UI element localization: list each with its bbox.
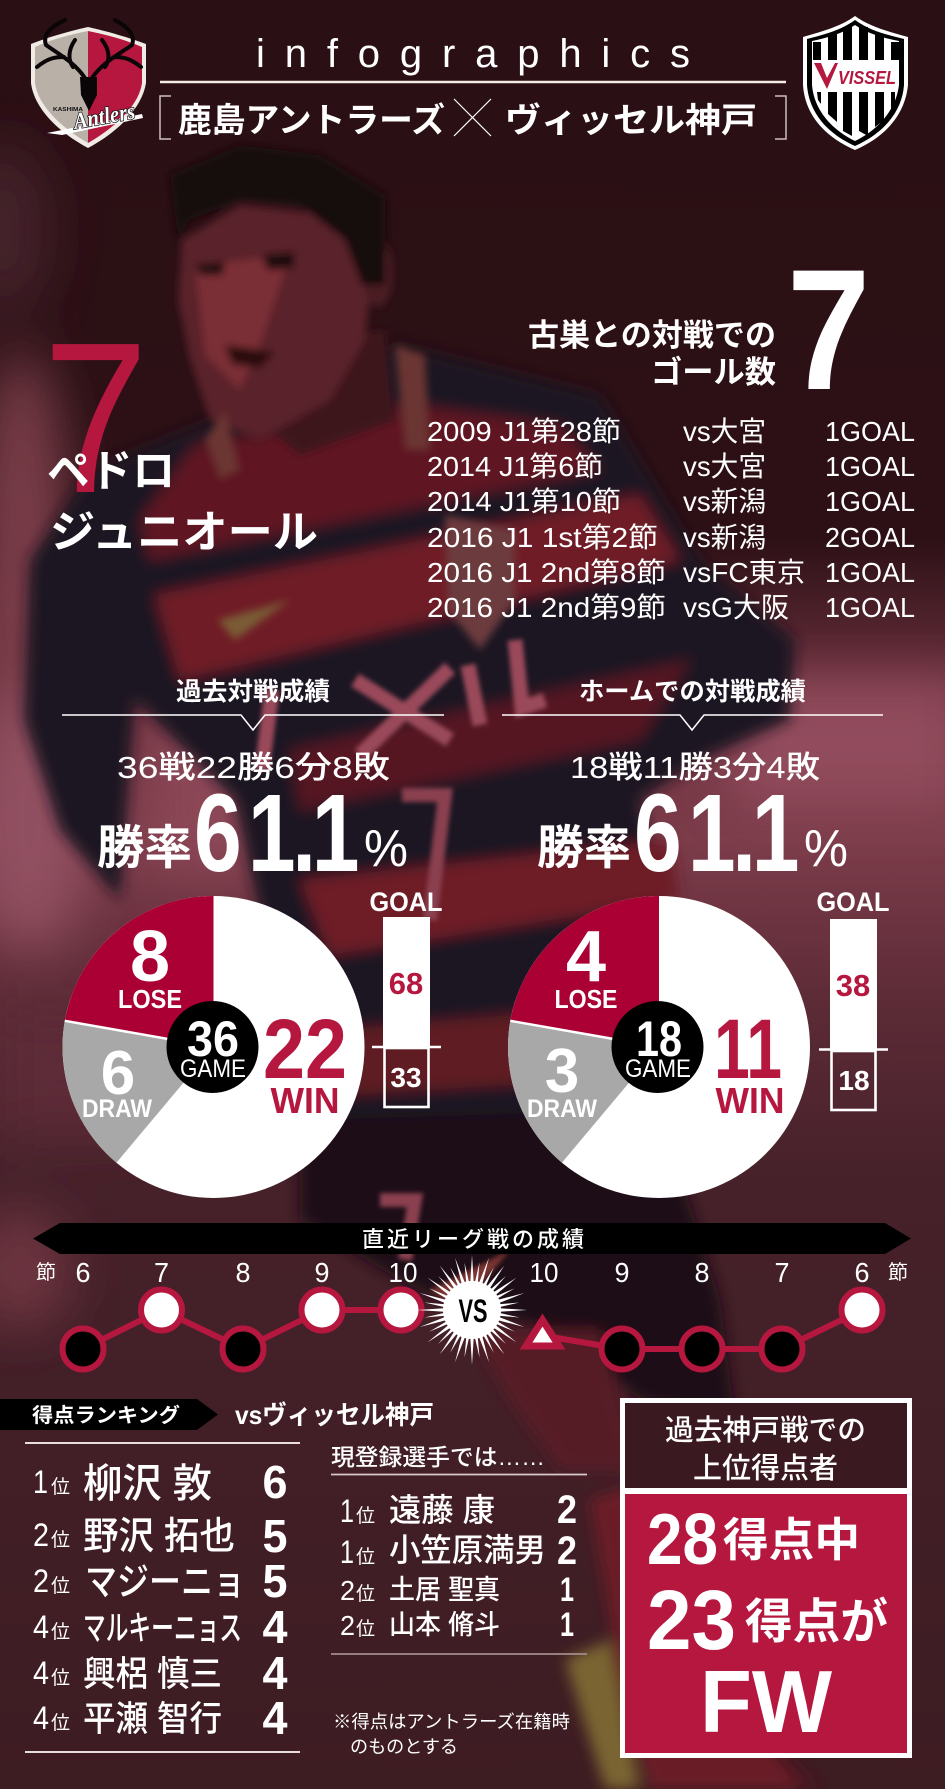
player name: ジュニオール <box>50 508 318 557</box>
logo: Kashima Antlers crest <box>31 20 146 148</box>
win rate <box>97 772 408 894</box>
round number labels: 6 <box>76 1257 90 1288</box>
pie chart: DRAW <box>82 1095 152 1123</box>
win rate: 勝率 <box>537 821 631 874</box>
pie chart: LOSE <box>118 984 182 1014</box>
goal history table: 1GOAL <box>825 416 915 447</box>
rank rows: 4 <box>262 1601 288 1653</box>
pie chart: GAME <box>625 1055 691 1083</box>
neck <box>235 330 395 455</box>
ranking heading: vs Vissel Kobe: vsヴィッセル神戸 <box>235 1400 434 1430</box>
rank rows: 位 <box>51 1476 70 1498</box>
shorts <box>300 1110 735 1420</box>
badge <box>445 515 515 650</box>
rank rows: 興梠 慎三 <box>83 1655 222 1694</box>
round number labels: 9 <box>314 1257 330 1288</box>
pie chart: WIN <box>270 1080 340 1121</box>
match-up heading: ヴィッセル神戸 <box>505 102 757 140</box>
match-up heading: 鹿島アントラーズ <box>178 101 445 140</box>
goal history table: vsG大阪 <box>683 592 789 623</box>
round number labels: 7 <box>774 1257 790 1288</box>
ranking list: all-time <box>25 1443 300 1752</box>
round number labels: 8 <box>694 1257 710 1288</box>
player shirt number 7 (crimson): 7 <box>43 298 148 538</box>
goal history table: vs大宮 <box>683 416 766 447</box>
footnote: のものとする <box>350 1737 458 1757</box>
round number labels: 9 <box>614 1257 630 1288</box>
rank rows: 4 <box>33 1609 49 1645</box>
banner: recent league results: 直近リーグ戦の成績 <box>362 1227 584 1252</box>
pie chart: 3 <box>545 1037 579 1106</box>
section heading: ホームでの対戦成績 <box>579 678 806 706</box>
rank rows: マルキーニョス <box>83 1610 242 1648</box>
goal bar: GOAL <box>370 887 442 917</box>
hair <box>170 145 385 285</box>
rank rows: 土居 聖真 <box>389 1575 500 1605</box>
ranking list: current squad <box>331 1444 587 1654</box>
logo wordmark: KASHIMA <box>53 107 83 113</box>
background photo: player figure <box>24 145 820 1789</box>
logo: Kashima Antlers crest: Antlers <box>70 99 137 134</box>
callout: top scorers against Kobe: 得点が <box>745 1596 888 1649</box>
goal bar: 38 <box>836 968 870 1003</box>
rank rows: 4 <box>262 1692 288 1744</box>
callout: top scorers against Kobe: 得点中 <box>723 1514 860 1566</box>
rank rows: 2 <box>33 1517 49 1553</box>
goal history table: 2016 J1 2nd第8節 <box>427 557 666 588</box>
rank rows: 位 <box>356 1546 375 1568</box>
round number labels: 10 <box>530 1257 558 1288</box>
goal history table: 1GOAL <box>825 486 915 517</box>
rank rows: 小笠原満男 <box>389 1532 546 1568</box>
record text: 36戦22勝6分8敗 <box>117 750 390 785</box>
jersey sponsor letters <box>262 640 545 770</box>
goal history table: 2014 J1第6節 <box>427 451 603 482</box>
rank rows: 柳沢 敦 <box>83 1462 212 1506</box>
pie chart: WIN <box>716 1080 784 1121</box>
rank rows: 位 <box>51 1575 70 1597</box>
rank rows: 1 <box>340 1534 354 1570</box>
round number labels <box>36 1257 908 1288</box>
round number labels: 8 <box>236 1257 250 1288</box>
goals against former club: ゴール数 <box>651 355 776 390</box>
goal history table: 2016 J1 2nd第9節 <box>427 592 666 623</box>
rank rows: 山本 脩斗 <box>389 1610 500 1640</box>
ranking tag <box>0 1399 218 1430</box>
goal history table: 1GOAL <box>825 451 915 482</box>
goal history table: 2GOAL <box>825 522 915 553</box>
win rate: 勝率 <box>97 821 192 874</box>
goal history table: vsFC東京 <box>683 557 805 588</box>
pie chart: 22 <box>263 1002 347 1096</box>
goal history table: 1GOAL <box>825 592 915 623</box>
rank rows: 遠藤 康 <box>389 1492 495 1528</box>
icon: VS burst <box>417 1255 527 1365</box>
rank rows: 位 <box>356 1505 375 1527</box>
goal history table: 2009 J1第28節 <box>427 416 621 447</box>
round number labels: 6 <box>854 1257 870 1288</box>
eyes and mouth <box>195 252 295 275</box>
win rate <box>537 772 848 894</box>
goal history table: vs新潟 <box>683 522 766 553</box>
header rule and brackets <box>160 81 786 83</box>
rank rows: 1 <box>33 1464 48 1500</box>
section heading: 過去対戦成績 <box>176 678 330 706</box>
pie chart: 18 <box>636 1011 682 1067</box>
goal bar <box>816 887 890 1110</box>
goal history table: 2014 J1第10節 <box>427 486 621 517</box>
rank rows: 5 <box>262 1555 288 1607</box>
pie chart <box>62 896 365 1198</box>
pie chart <box>508 896 810 1198</box>
goals against former club: 古巣との対戦での <box>528 318 776 353</box>
goal bar: GOAL <box>816 887 890 917</box>
ranking tag: 得点ランキング <box>32 1403 180 1427</box>
callout: top scorers against Kobe: 23 <box>647 1573 736 1667</box>
goal bar: 18 <box>838 1065 870 1096</box>
arms and torso <box>24 345 795 1120</box>
ranking list: current squad: 現登録選手では…… <box>331 1444 545 1470</box>
callout: top scorers against Kobe <box>622 1400 910 1756</box>
callout: top scorers against Kobe: FW <box>700 1652 832 1751</box>
goal history table: vs新潟 <box>683 486 766 517</box>
round number labels: 7 <box>154 1257 169 1288</box>
rank rows: 位 <box>356 1583 375 1605</box>
rank rows: 1 <box>560 1606 574 1644</box>
pie chart: GAME <box>180 1055 246 1083</box>
panel: all-time record <box>62 678 444 1198</box>
rank rows: マジーニョ <box>85 1562 245 1604</box>
callout: top scorers against Kobe: 上位得点者 <box>693 1452 838 1485</box>
rank rows: 4 <box>33 1700 49 1736</box>
logo: Vissel Kobe crest: VISSEL <box>838 68 896 88</box>
pie chart: 36 <box>187 1011 239 1067</box>
rank rows: 位 <box>51 1667 70 1689</box>
rank rows: 1 <box>560 1571 574 1609</box>
player name: ペドロ <box>47 447 175 496</box>
goal history table: 2016 J1 1st第2節 <box>427 522 658 553</box>
leg <box>470 1330 640 1470</box>
rank rows: 位 <box>356 1618 375 1640</box>
round number labels: 節 <box>36 1261 56 1284</box>
callout: top scorers against Kobe: 過去神戸戦での <box>665 1414 866 1447</box>
goal bar: 68 <box>389 966 423 1001</box>
goal history table: 1GOAL <box>825 557 915 588</box>
rank rows: 1 <box>340 1493 354 1529</box>
win rate: % <box>364 820 408 878</box>
rank rows: 2 <box>557 1488 577 1532</box>
match-up heading <box>178 99 757 140</box>
round number labels: 節 <box>888 1261 908 1284</box>
rank rows <box>33 1456 288 1744</box>
rank rows: 野沢 拓也 <box>83 1516 235 1558</box>
record text: 18戦11勝3分4敗 <box>570 750 820 785</box>
jersey number 7 <box>380 795 445 1260</box>
rank rows: 平瀬 智行 <box>83 1700 222 1739</box>
pie chart: 6 <box>101 1039 135 1108</box>
footnote: ※得点はアントラーズ在籍時 <box>333 1712 570 1732</box>
rank rows: 2 <box>340 1575 355 1606</box>
rank rows: 2 <box>33 1563 49 1599</box>
rank rows: 2 <box>557 1529 577 1573</box>
pie chart: LOSE <box>554 984 618 1014</box>
logo: Vissel Kobe crest <box>803 16 908 150</box>
pie chart: DRAW <box>527 1095 597 1123</box>
panel: home record <box>502 678 890 1198</box>
callout: top scorers against Kobe: 28 <box>647 1500 718 1580</box>
icon: VS burst: VS <box>458 1293 488 1329</box>
results timeline: Antlers <box>62 1290 422 1370</box>
collar <box>205 345 430 480</box>
rank rows: 位 <box>51 1712 70 1734</box>
rank rows <box>340 1488 577 1644</box>
pie chart: 11 <box>714 1002 782 1096</box>
pie chart: 4 <box>566 917 606 997</box>
rank rows: 4 <box>262 1647 288 1699</box>
results timeline: Vissel Kobe <box>526 1290 882 1370</box>
pie chart: 8 <box>130 917 170 997</box>
face <box>178 205 372 440</box>
win rate: 61.1 <box>634 772 799 894</box>
rank rows: 2 <box>340 1610 355 1641</box>
round number labels: 10 <box>388 1257 418 1288</box>
rank rows: 5 <box>262 1510 288 1562</box>
header title: infographics: infographics <box>256 32 690 76</box>
goal history table <box>427 416 915 623</box>
banner: recent league results <box>33 1223 911 1254</box>
footnote <box>333 1712 570 1757</box>
goals against former club <box>528 234 870 426</box>
goals against former club: 7 <box>787 234 870 426</box>
rank rows: 位 <box>51 1621 70 1643</box>
player name <box>47 447 318 557</box>
rank rows: 位 <box>51 1529 70 1551</box>
goal history table: vs大宮 <box>683 451 766 482</box>
goal bar <box>370 887 442 1107</box>
goal bar: 33 <box>390 1062 422 1093</box>
ear <box>363 239 393 307</box>
win rate: % <box>804 820 848 878</box>
rank rows: 4 <box>33 1655 49 1691</box>
rank rows: 6 <box>262 1456 288 1508</box>
win rate: 61.1 <box>194 772 359 894</box>
